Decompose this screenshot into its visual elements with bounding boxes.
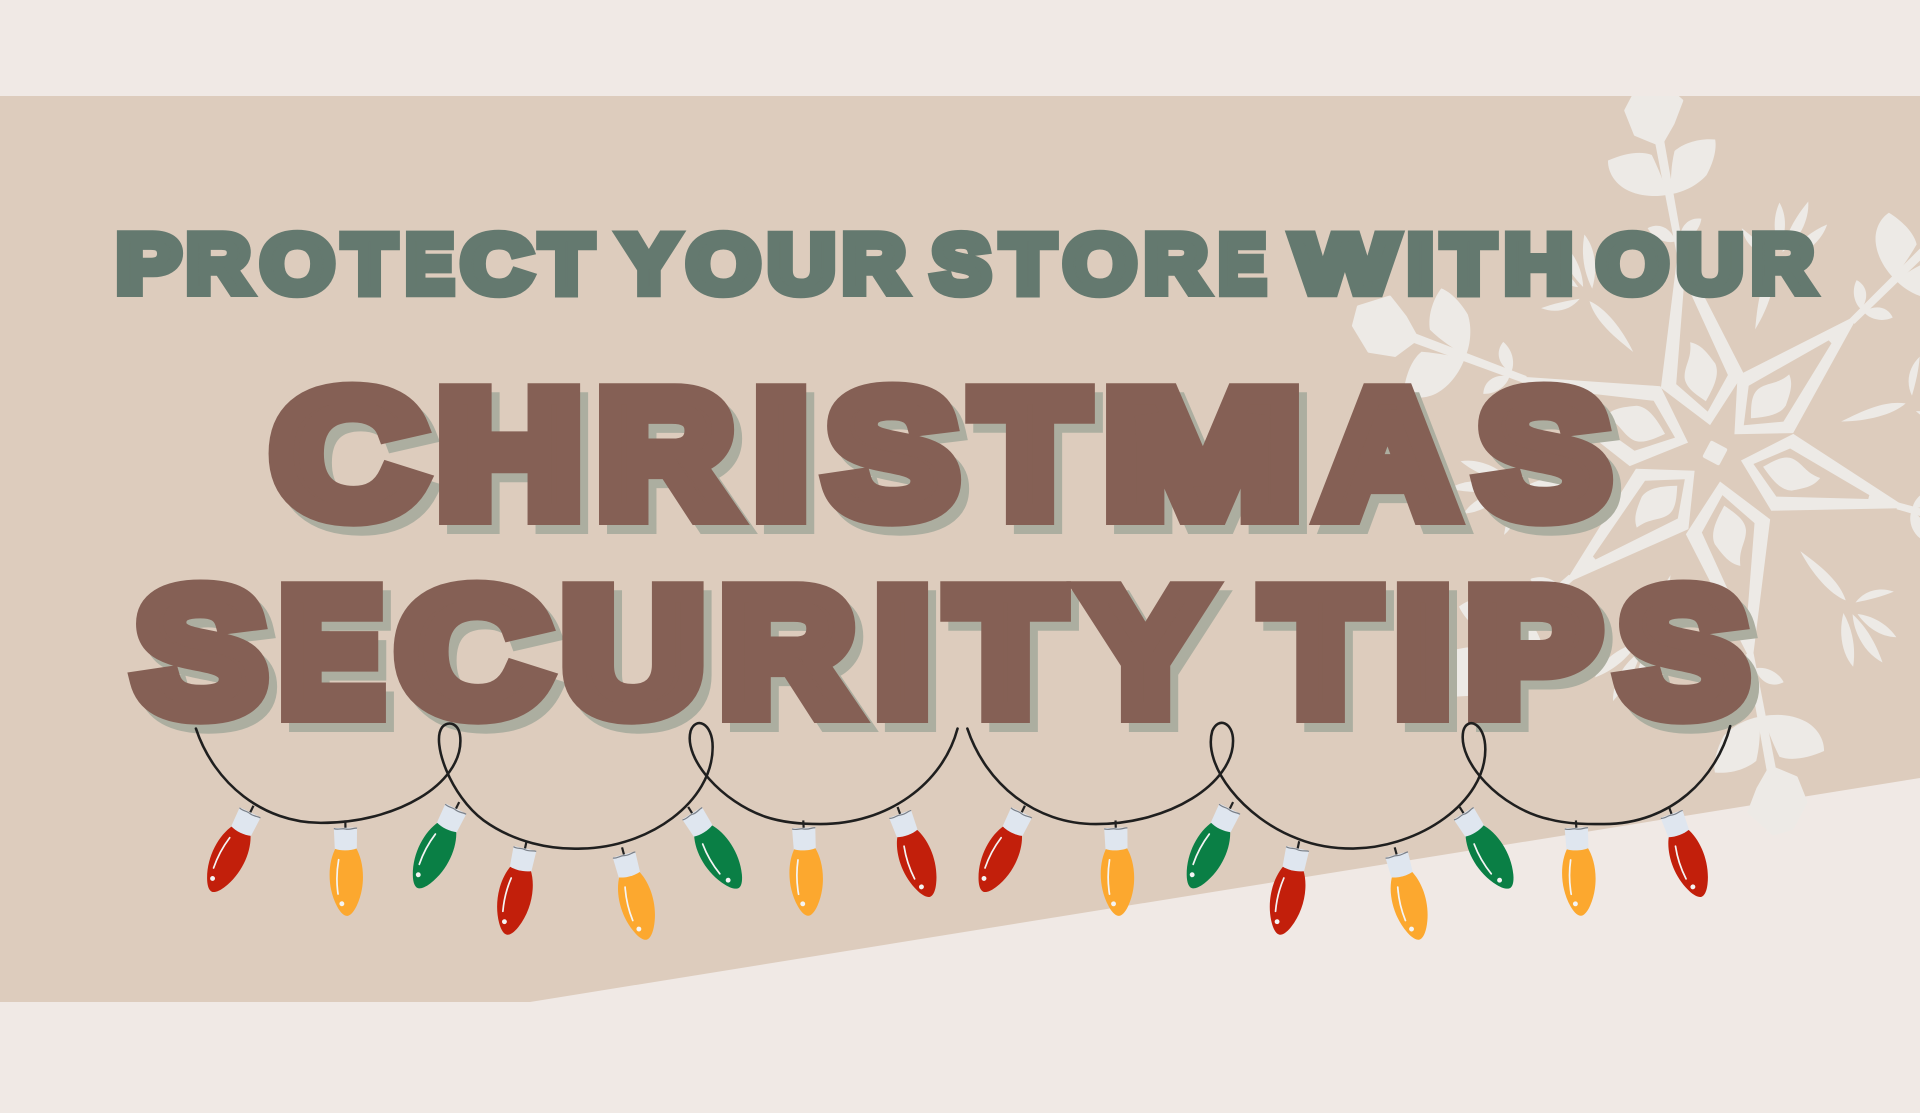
- heading: protect your store with our: P: [117, 219, 180, 310]
- icon: orange bulb: [1559, 820, 1598, 917]
- title: christmas security tips: I: [1396, 554, 1450, 750]
- title: christmas security tips: T: [949, 554, 1062, 750]
- heading: protect your store with our: R: [187, 219, 250, 310]
- heading: protect your store with our: U: [1677, 219, 1743, 310]
- heading: protect your store with our: T: [344, 219, 395, 310]
- title: christmas security tips: R: [721, 554, 854, 750]
- title: christmas security tips: [136, 356, 1747, 750]
- title: christmas security tips: P: [1467, 554, 1600, 750]
- heading: protect your store with our: R: [1752, 219, 1813, 310]
- heading: protect your store with our: R: [843, 219, 905, 310]
- title: christmas security tips: M: [1104, 356, 1301, 552]
- icon: orange bulb: [787, 820, 825, 917]
- title: christmas security tips: S: [1478, 356, 1609, 552]
- heading: protect your store with our: U: [768, 219, 835, 310]
- title: christmas security tips: S: [136, 554, 265, 750]
- title: christmas security tips: U: [562, 554, 704, 750]
- icon: green bulb: [1445, 798, 1524, 897]
- heading: protect your store with our: R: [1145, 219, 1207, 310]
- title: christmas security tips: I: [876, 554, 929, 750]
- heading: protect your store with our: I: [1408, 219, 1433, 310]
- title: christmas security tips: E: [280, 554, 383, 750]
- heading: protect your store with our: O: [687, 219, 760, 310]
- icon: red bulb: [968, 798, 1040, 899]
- icon: orange bulb: [1099, 820, 1136, 916]
- heading: protect your store with our: C: [462, 219, 532, 310]
- title: christmas security tips: A: [1320, 356, 1455, 552]
- icon: orange bulb: [329, 820, 364, 916]
- title: christmas security tips: Y: [1083, 554, 1208, 750]
- title: christmas security tips: R: [598, 356, 733, 552]
- icon: orange bulb: [606, 843, 663, 944]
- title: christmas security tips: C: [272, 356, 424, 552]
- title: christmas security tips: T: [974, 356, 1086, 552]
- title: christmas security tips: T: [1264, 554, 1377, 750]
- icon: green bulb: [402, 795, 474, 895]
- heading: protect your store with our: O: [1597, 219, 1668, 310]
- heading: protect your store with our: Y: [620, 219, 678, 310]
- title: christmas security tips: H: [438, 356, 582, 552]
- heading: protect your store with our: W: [1294, 219, 1397, 310]
- heading: protect your store with our: E: [1219, 219, 1266, 310]
- icon: red bulb: [490, 838, 543, 938]
- icon: green bulb: [1176, 795, 1248, 895]
- heading: protect your store with our: H: [1505, 219, 1572, 310]
- title: christmas security tips: S: [1619, 554, 1747, 750]
- icon: red bulb: [882, 801, 946, 902]
- heading: protect your store with our: E: [406, 219, 454, 310]
- icon: green bulb: [674, 798, 753, 897]
- title: christmas security tips: C: [398, 554, 548, 750]
- heading: protect your store with our: [117, 219, 1813, 310]
- icon: red bulb: [1653, 801, 1717, 902]
- icon: red bulb: [197, 798, 268, 899]
- title: christmas security tips: S: [827, 356, 957, 552]
- string of christmas lights: [196, 723, 1730, 944]
- icon: orange bulb: [1379, 843, 1436, 944]
- heading: protect your store with our: T: [541, 219, 592, 310]
- light wire: [196, 723, 1730, 849]
- heading: protect your store with our: S: [932, 219, 990, 310]
- heading: protect your store with our: O: [1064, 219, 1136, 310]
- heading: protect your store with our: O: [261, 219, 334, 310]
- heading: protect your store with our: T: [1002, 219, 1054, 310]
- snowflake: [1335, 71, 1920, 842]
- heading: protect your store with our: T: [1443, 219, 1494, 310]
- icon: red bulb: [1263, 838, 1316, 938]
- title: christmas security tips: I: [755, 356, 808, 552]
